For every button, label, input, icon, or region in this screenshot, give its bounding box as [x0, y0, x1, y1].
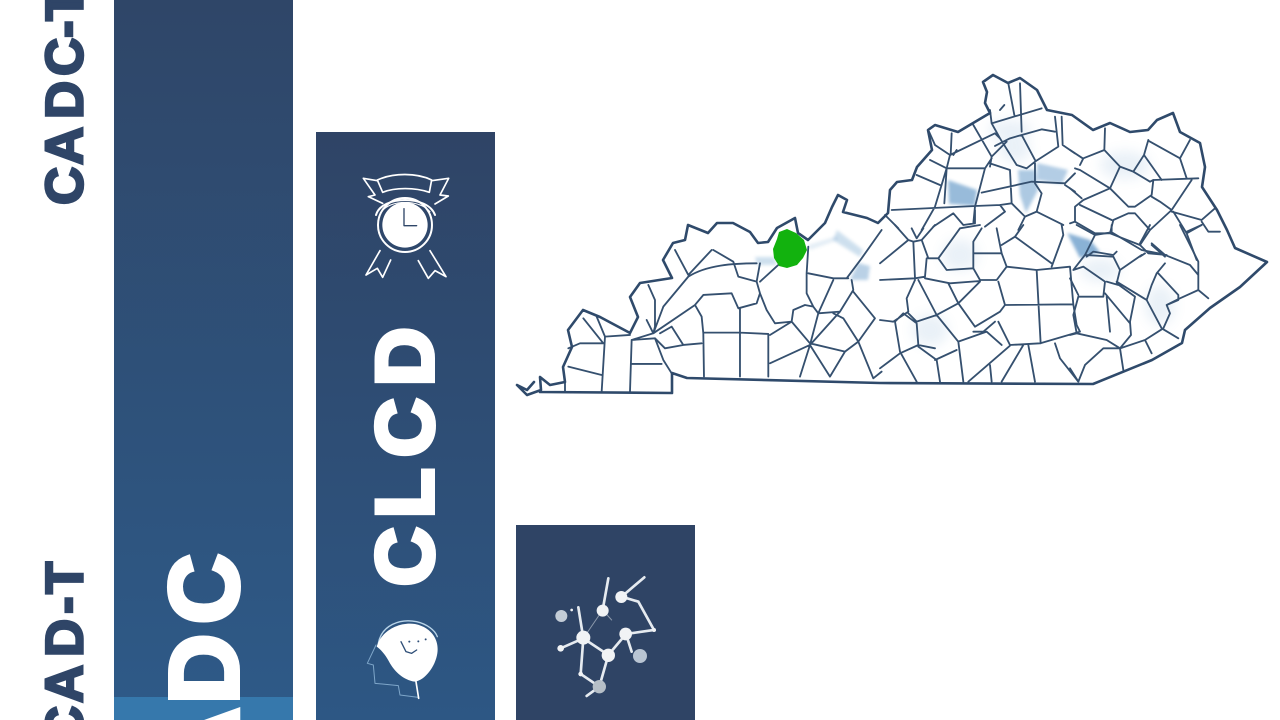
bar: ADC	[114, 0, 293, 720]
map: county lines west	[565, 230, 882, 392]
bar: network	[516, 525, 695, 720]
icon: head with brain bubble	[367, 621, 438, 698]
map: Kentucky counties	[517, 75, 1267, 395]
bar accent band	[114, 697, 293, 720]
bar title: CLCD: CLCD	[360, 328, 450, 586]
map marker: green location	[773, 229, 807, 268]
bar: CLCD	[316, 132, 495, 720]
map: state outline	[517, 75, 1267, 395]
icon: clock with ribbon	[363, 174, 449, 278]
map shading: blue highlights	[755, 120, 1175, 346]
map: county lines northeast	[885, 83, 1075, 230]
map: county lines far east	[1070, 128, 1220, 260]
map: county lines southeast	[1070, 225, 1208, 382]
icon: molecule network	[555, 577, 656, 696]
map: county lines south central	[880, 225, 1080, 382]
